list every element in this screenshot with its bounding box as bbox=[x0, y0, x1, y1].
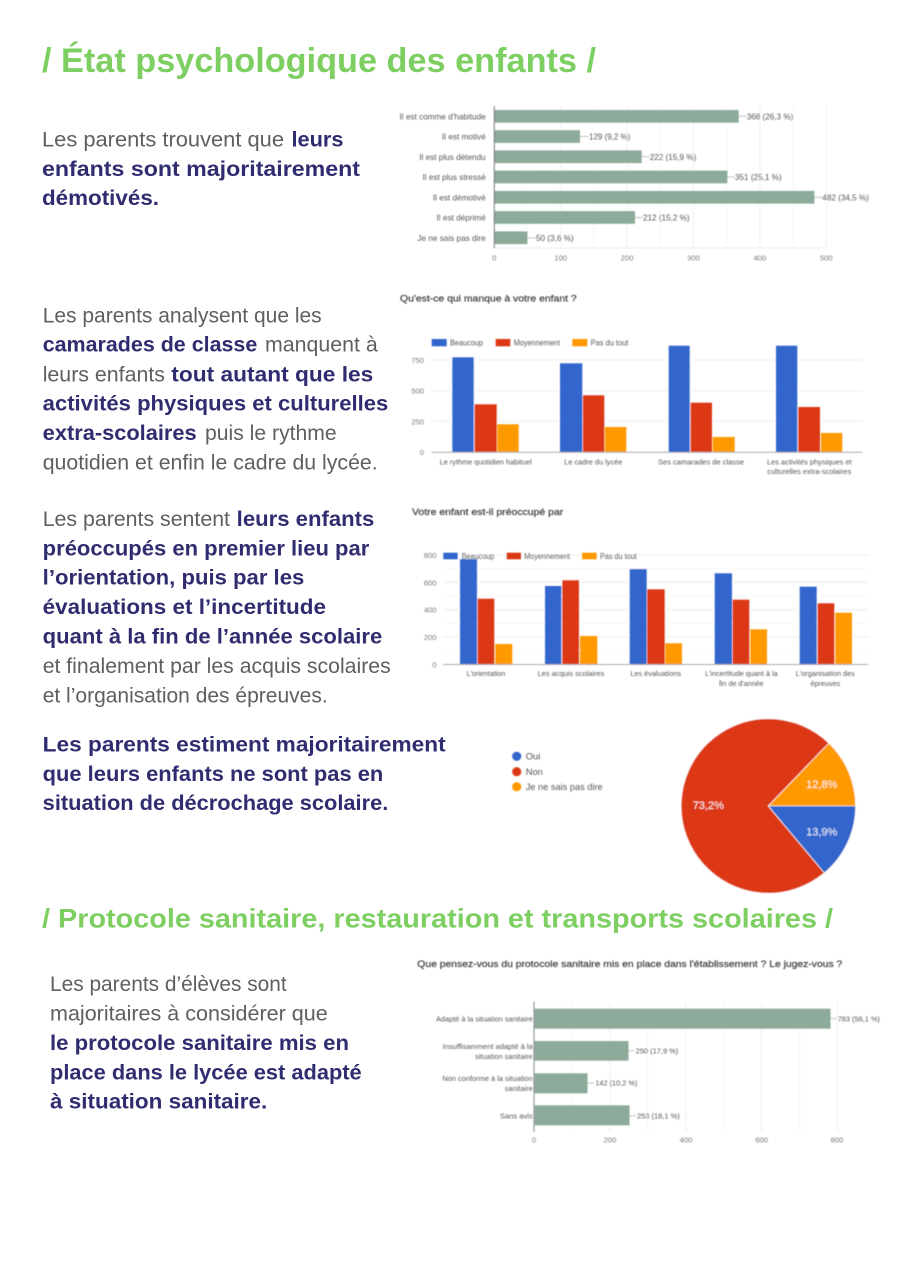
text block: camarades de classe: quotidien et enfin le cadre du lycée. bbox=[43, 450, 378, 474]
category labels: L'organisation des bbox=[796, 669, 855, 678]
title: protocole sanitaire: / Protocole sanitaire, restauration et transports scolaires / bbox=[42, 903, 834, 933]
category labels: culturelles extra-scolaires bbox=[767, 467, 851, 476]
text block: démotivés bbox=[42, 128, 360, 210]
text block: préoccupations: leurs enfants bbox=[237, 507, 374, 531]
axis ticks: 100 bbox=[554, 253, 567, 262]
text block: camarades de classe bbox=[43, 304, 388, 474]
bars: orange bbox=[497, 424, 842, 452]
category labels: Il est déprimé bbox=[437, 214, 486, 222]
value labels bbox=[536, 112, 869, 243]
category labels: situation sanitaire bbox=[475, 1052, 533, 1061]
text block: camarades de classe: manquent à bbox=[265, 333, 378, 357]
axis ticks: 500 bbox=[411, 387, 424, 396]
text block: camarades de classe: extra-scolaires bbox=[43, 421, 197, 445]
category labels: Le rythme quotidien habituel bbox=[440, 458, 532, 466]
bars: blue bbox=[460, 559, 817, 664]
legend: Je ne sais pas dire bbox=[526, 781, 603, 792]
category labels: Les activités physiques et bbox=[767, 458, 853, 466]
axis ticks: 800 bbox=[831, 1136, 843, 1145]
chart title: Votre enfant est-il préoccupé par bbox=[412, 507, 563, 517]
category labels: Les acquis scolaires bbox=[538, 669, 605, 678]
category labels: Il est démotivé bbox=[433, 193, 486, 202]
text block: préoccupations: évaluations et l’incertitude bbox=[43, 595, 326, 619]
value labels: 482 (34,5 %) bbox=[822, 193, 869, 202]
chart title: Qu'est-ce qui manque à votre enfant ? bbox=[400, 294, 577, 304]
value labels bbox=[595, 1014, 880, 1120]
pie chart: décrochage bbox=[512, 719, 856, 893]
category labels: Il est plus détendu bbox=[419, 153, 486, 162]
legend: Moyennement bbox=[524, 552, 571, 561]
value labels: 129 (9,2 %) bbox=[589, 132, 631, 142]
text block: décrochage: que leurs enfants ne sont pas en bbox=[43, 762, 383, 786]
axis ticks: 750 bbox=[411, 356, 424, 365]
legend: Oui bbox=[526, 751, 540, 762]
category labels: fin de d'année bbox=[719, 679, 764, 688]
value labels: 368 (26,3 %) bbox=[747, 112, 794, 121]
axis ticks bbox=[424, 551, 436, 669]
category labels bbox=[467, 669, 855, 688]
column chart: ce qui manque bbox=[400, 294, 863, 476]
axis ticks: 0 bbox=[532, 1136, 536, 1145]
text block: préoccupations bbox=[43, 507, 391, 707]
legend: Non bbox=[526, 766, 543, 777]
legend: Moyennement bbox=[514, 339, 561, 348]
text block: camarades de classe: Les parents analysent que les bbox=[43, 304, 322, 328]
text block: protocole sanitaire: Les parents d’élèves sont bbox=[50, 972, 287, 996]
text block: camarades de classe: puis le rythme bbox=[205, 421, 337, 445]
category labels bbox=[399, 112, 486, 243]
text block: décrochage: situation de décrochage scolaire. bbox=[43, 791, 388, 815]
axis ticks: 300 bbox=[687, 253, 700, 262]
bars bbox=[534, 1009, 830, 1125]
legend: Beaucoup bbox=[462, 552, 495, 561]
axis ticks: 500 bbox=[820, 253, 833, 262]
bar chart: protocole sanitaire bbox=[417, 959, 880, 1145]
axis ticks bbox=[492, 253, 833, 262]
slice labels: 13,9% bbox=[806, 826, 838, 838]
value labels: 351 (25,1 %) bbox=[735, 173, 782, 182]
axis ticks: 400 bbox=[424, 606, 436, 615]
category labels: Sans avis bbox=[500, 1112, 533, 1120]
bars: red bbox=[475, 395, 820, 452]
value labels: 212 (15,2 %) bbox=[643, 214, 690, 222]
value labels: 142 (10,2 %) bbox=[595, 1079, 637, 1088]
legend: Pas du tout bbox=[600, 552, 637, 561]
text block: camarades de classe: leurs enfants bbox=[43, 362, 165, 386]
text block: préoccupations: Les parents sentent bbox=[43, 507, 230, 531]
text block: démotivés: Les parents trouvent que bbox=[42, 128, 284, 152]
axis ticks: 400 bbox=[680, 1136, 692, 1145]
value labels: 783 (56,1 %) bbox=[838, 1014, 880, 1023]
text block: démotivés: enfants sont majoritairement bbox=[42, 157, 360, 181]
category labels: Adapté à la situation sanitaire bbox=[436, 1014, 533, 1024]
category labels: Il est motivé bbox=[442, 132, 486, 142]
text block: camarades de classe: tout autant que les bbox=[171, 362, 373, 386]
axis ticks: 400 bbox=[754, 253, 766, 262]
text block: préoccupations: préoccupés en premier lieu par bbox=[43, 536, 370, 560]
column chart: préoccupations bbox=[412, 507, 868, 688]
category labels: Le cadre du lycée bbox=[564, 458, 622, 466]
legend bbox=[512, 751, 603, 792]
legend: Beaucoup bbox=[450, 339, 484, 348]
legend: Pas du tout bbox=[591, 339, 629, 348]
bars bbox=[494, 110, 814, 244]
text block: préoccupations: l’orientation, puis par les bbox=[43, 566, 304, 590]
axis ticks: 250 bbox=[411, 417, 424, 426]
category labels: Les évaluations bbox=[630, 669, 681, 678]
category labels bbox=[440, 458, 853, 476]
bars: red bbox=[478, 580, 834, 664]
category labels: Il est comme d'habitude bbox=[399, 112, 486, 121]
category labels: Ses camarades de classe bbox=[658, 458, 744, 466]
legend bbox=[432, 339, 629, 348]
axis ticks: 600 bbox=[755, 1136, 768, 1145]
category labels: Insuffisamment adapté à la bbox=[443, 1042, 534, 1051]
text block: préoccupations: quant à la fin de l’année scolaire bbox=[43, 624, 382, 648]
axis ticks: 200 bbox=[424, 633, 436, 642]
category labels: Il est plus stressé bbox=[422, 173, 486, 182]
text block: décrochage bbox=[43, 733, 446, 815]
value labels: 253 (18,1 %) bbox=[637, 1112, 680, 1120]
slice labels bbox=[693, 779, 838, 838]
text block: camarades de classe: camarades de classe bbox=[43, 333, 257, 357]
axis ticks: 600 bbox=[424, 578, 436, 587]
chart title: Que pensez-vous du protocole sanitaire mis en place dans l'établissement ? Le jugez-vous ? bbox=[417, 959, 842, 969]
bars: blue bbox=[452, 346, 797, 452]
text block: protocole sanitaire: majoritaires à considérer que bbox=[50, 1002, 328, 1026]
slice labels: 12,8% bbox=[806, 779, 838, 791]
axis ticks: 800 bbox=[424, 551, 436, 560]
category labels bbox=[436, 1014, 534, 1120]
axis ticks: 0 bbox=[420, 448, 424, 457]
axis ticks: 200 bbox=[621, 253, 633, 262]
axis ticks bbox=[532, 1136, 843, 1145]
axis ticks bbox=[411, 356, 424, 457]
text block: protocole sanitaire: à situation sanitaire. bbox=[50, 1089, 267, 1113]
category labels: L'orientation bbox=[467, 669, 505, 678]
slices bbox=[681, 719, 856, 893]
text block: camarades de classe: activités physiques et culturelles bbox=[43, 392, 388, 416]
category labels: épreuves bbox=[810, 679, 840, 688]
value labels: 250 (17,9 %) bbox=[636, 1046, 678, 1055]
bar chart: état de l'enfant bbox=[399, 106, 869, 262]
slice labels: 73,2% bbox=[693, 800, 724, 812]
value labels: 50 (3,6 %) bbox=[536, 234, 574, 243]
text block: préoccupations: et l’organisation des épreuves. bbox=[43, 683, 328, 707]
axis ticks: 200 bbox=[604, 1136, 616, 1145]
axis ticks: 0 bbox=[492, 253, 496, 262]
title: état psychologique: / État psychologique des enfants / bbox=[42, 42, 597, 80]
axis ticks: 0 bbox=[432, 660, 436, 669]
text block: démotivés: leurs bbox=[292, 128, 344, 152]
category labels: L'incertitude quant à la bbox=[705, 669, 778, 678]
value labels: 222 (15,9 %) bbox=[650, 153, 697, 162]
text block: protocole sanitaire: place dans le lycée est adapté bbox=[50, 1060, 362, 1084]
category labels: Non conforme à la situation bbox=[442, 1074, 533, 1083]
legend bbox=[443, 552, 637, 561]
category labels: sanitaire bbox=[505, 1084, 533, 1093]
text block: préoccupations: et finalement par les acquis scolaires bbox=[43, 654, 391, 678]
text block: protocole sanitaire bbox=[50, 972, 362, 1113]
bars: orange bbox=[495, 613, 852, 664]
text block: protocole sanitaire: le protocole sanitaire mis en bbox=[50, 1031, 349, 1055]
text block: décrochage: Les parents estiment majoritairement bbox=[43, 733, 446, 757]
category labels: Je ne sais pas dire bbox=[417, 234, 486, 243]
text block: démotivés: démotivés. bbox=[42, 186, 159, 210]
